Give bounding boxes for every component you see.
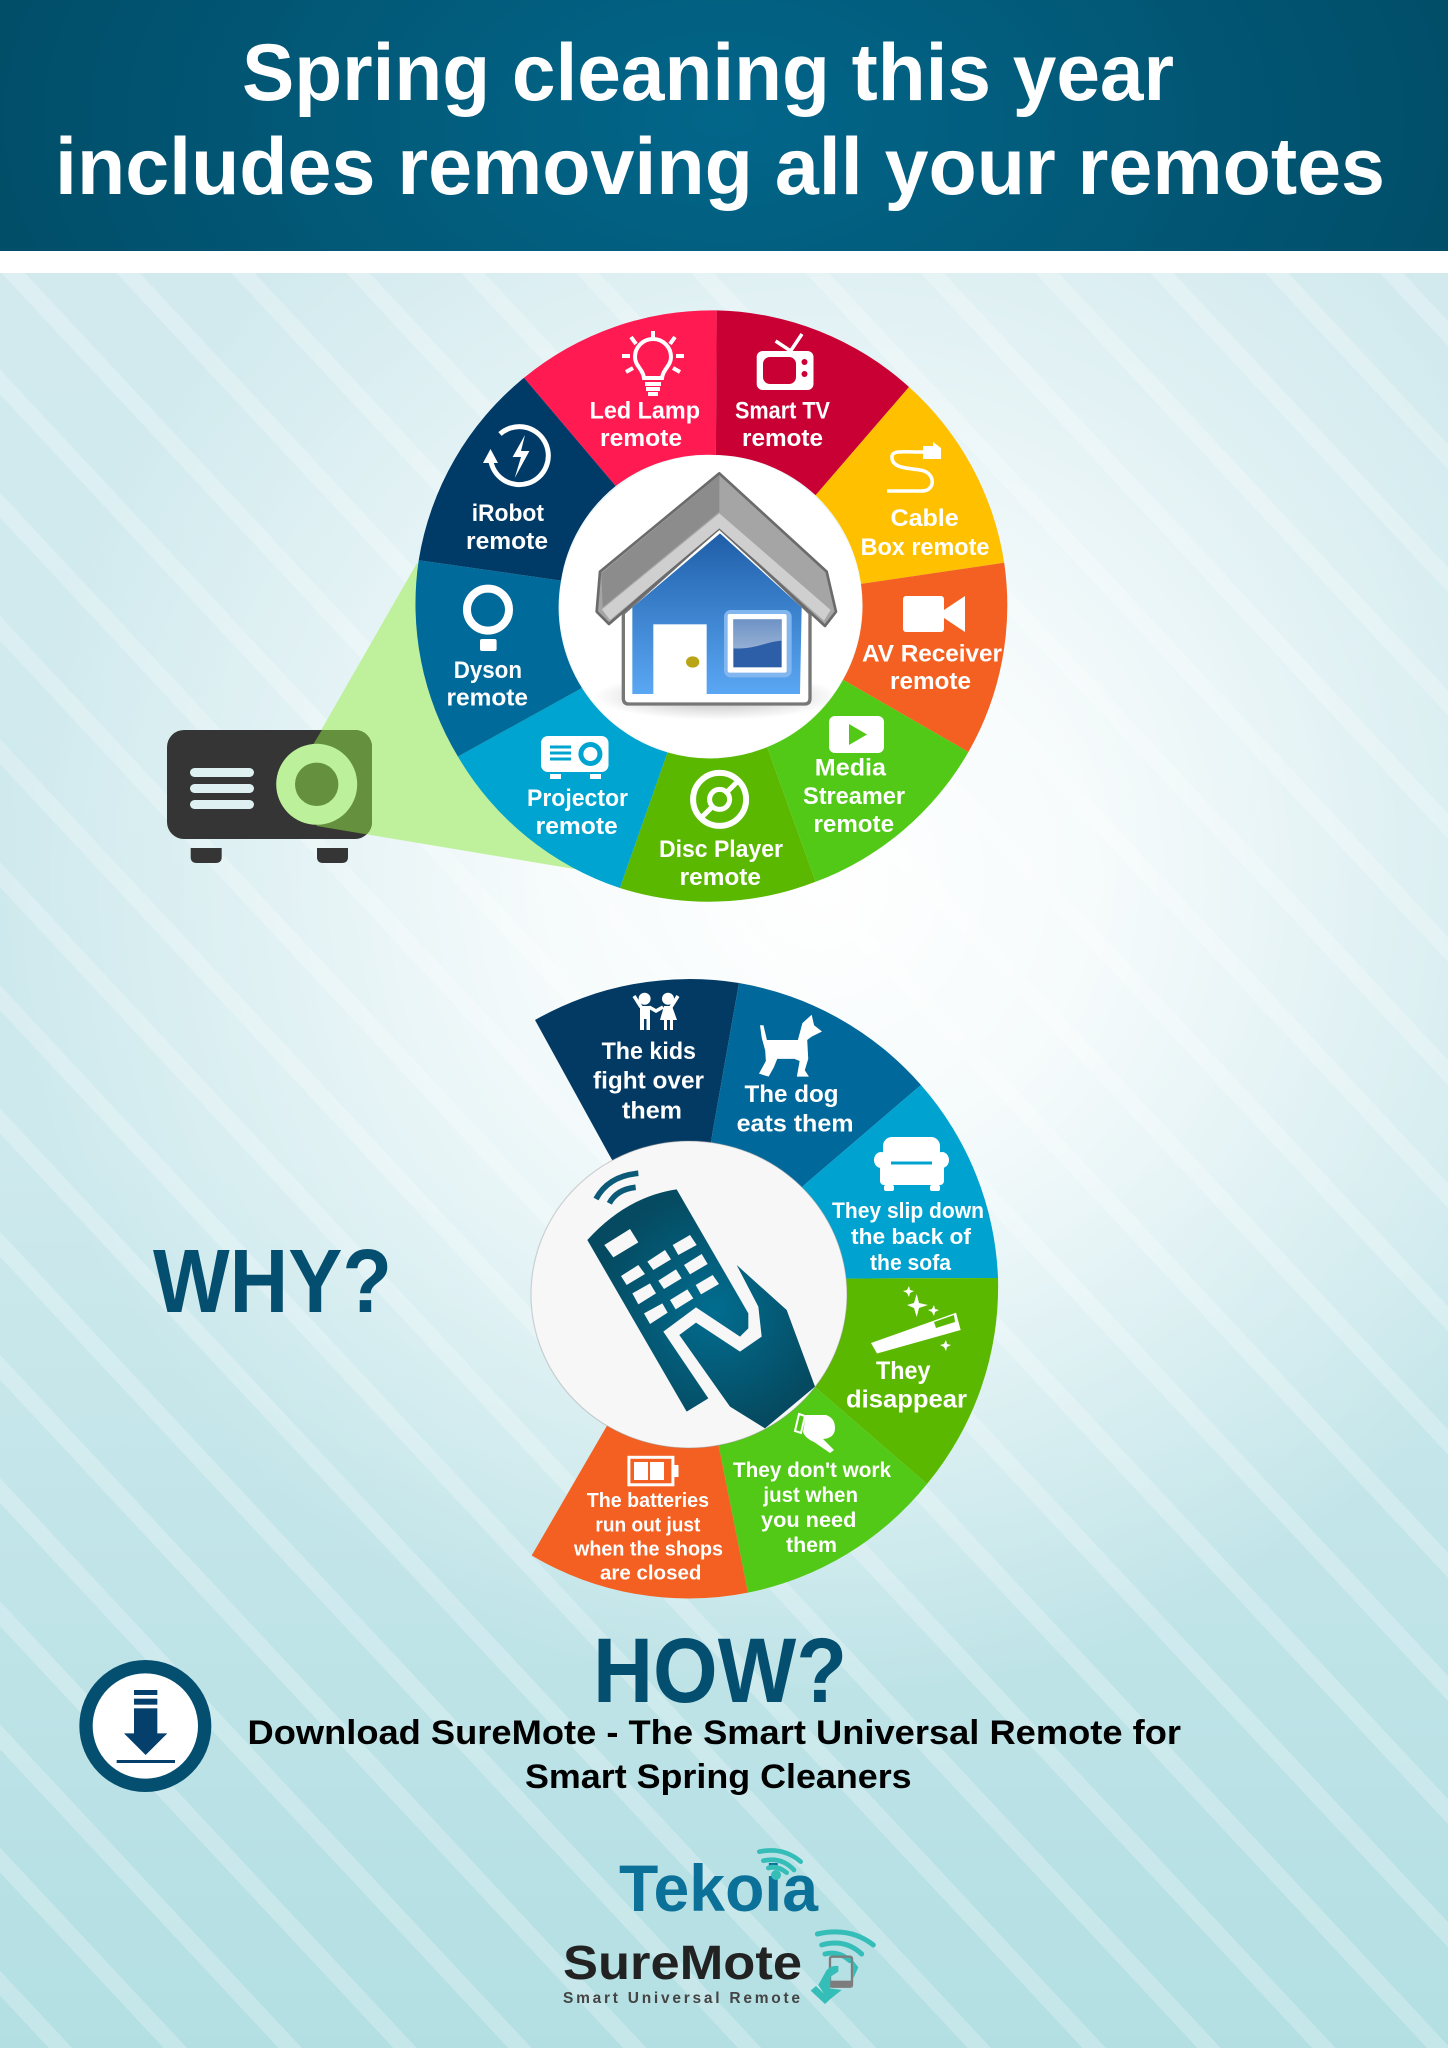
segment: AV Receiver: AV Receiver	[862, 640, 1002, 667]
segment: Projector: Projector	[527, 785, 628, 812]
segment: dog: eats them	[737, 1110, 854, 1137]
title banner: Spring cleaning this year	[242, 28, 1174, 118]
segment: disappear	[689, 1278, 998, 1484]
segment: Disc Player: Disc Player	[659, 836, 783, 863]
segment: Dyson: Dyson	[454, 657, 522, 684]
segment: AV Receiver	[843, 563, 1007, 752]
segment: Cable Box: Cable	[890, 505, 959, 532]
segment: batteries: run out just	[595, 1514, 701, 1536]
segment: kids	[535, 979, 739, 1294]
segment: Cable Box	[816, 387, 1004, 584]
segment: dog	[689, 983, 921, 1294]
segment: kids: them	[622, 1098, 682, 1125]
segment: iRobot	[419, 378, 616, 581]
remotes wheel	[415, 310, 1007, 902]
segment: Smart TV	[716, 310, 909, 495]
segment: dog: The dog	[744, 1081, 838, 1108]
segment: do not work: They don't work	[733, 1459, 891, 1482]
logo: Tekoia: Tekoia	[619, 1851, 819, 1925]
call to action text: Download SureMote - The Smart Universal Remote for	[248, 1714, 1181, 1752]
icon: battery	[629, 1457, 678, 1485]
icon: hand holding remote	[587, 1173, 815, 1428]
logo: SureMote	[563, 1932, 873, 2007]
segment: Led Lamp	[524, 310, 717, 486]
segment: disappear: They	[876, 1357, 931, 1385]
segment: Smart TV: remote	[742, 425, 823, 452]
segment: kids: The kids	[602, 1038, 696, 1065]
segment: disappear: disappear	[846, 1385, 967, 1413]
icon: wand and sparkles	[871, 1286, 961, 1354]
WHY heading: WHY?	[153, 1232, 392, 1332]
segment: Disc Player	[620, 747, 816, 902]
icon: house	[593, 473, 840, 720]
segment: batteries: are closed	[600, 1562, 701, 1584]
segment: iRobot: remote	[466, 528, 548, 555]
projector with light beam	[167, 563, 578, 870]
segment: Media Streamer	[767, 680, 968, 882]
segment: do not work: you need	[761, 1509, 856, 1532]
segment: Led Lamp: remote	[600, 425, 682, 452]
segment: do not work: them	[786, 1534, 837, 1557]
segment: Led Lamp: Led Lamp	[590, 398, 700, 425]
title banner: includes removing all your remotes	[55, 122, 1385, 212]
segment: do not work: just when	[762, 1484, 858, 1507]
white hub	[560, 455, 862, 757]
icon: thumbs down	[795, 1414, 835, 1453]
segment: batteries	[532, 1294, 748, 1598]
call to action text	[248, 1714, 1181, 1796]
segment: sofa: They slip down	[832, 1198, 984, 1223]
icon: download	[79, 1660, 211, 1792]
title banner	[0, 0, 1448, 251]
segment: Media Streamer: remote	[814, 811, 894, 838]
call to action text: Smart Spring Cleaners	[525, 1758, 912, 1796]
segment: do not work	[689, 1294, 927, 1593]
reasons spiral	[531, 979, 998, 1598]
segment: sofa: the back of	[851, 1224, 972, 1249]
icon: dog	[759, 1015, 822, 1077]
segment: Projector	[458, 688, 668, 888]
segment: sofa	[689, 1085, 998, 1294]
segment: kids: fight over	[593, 1067, 704, 1094]
segment: batteries: The batteries	[587, 1490, 709, 1512]
segment: Media Streamer: Streamer	[803, 783, 905, 810]
segment: Dyson	[415, 560, 582, 756]
segment: AV Receiver: remote	[890, 668, 971, 695]
segment: Smart TV: Smart TV	[735, 398, 830, 425]
segment: iRobot: iRobot	[472, 500, 544, 527]
segment: sofa: the sofa	[870, 1250, 952, 1275]
segment: Projector: remote	[536, 813, 618, 840]
remote hub	[531, 1141, 847, 1448]
segment: Dyson: remote	[446, 684, 528, 712]
logo: SureMote: SureMote	[563, 1937, 802, 1990]
segment: Media Streamer: Media	[815, 755, 887, 782]
logo: SureMote: Smart Universal Remote	[563, 1990, 800, 2007]
HOW heading: HOW?	[593, 1620, 847, 1722]
segment: batteries: when the shops	[573, 1538, 723, 1560]
segment: Cable Box: Box remote	[861, 534, 989, 561]
segment: Disc Player: remote	[680, 864, 761, 891]
